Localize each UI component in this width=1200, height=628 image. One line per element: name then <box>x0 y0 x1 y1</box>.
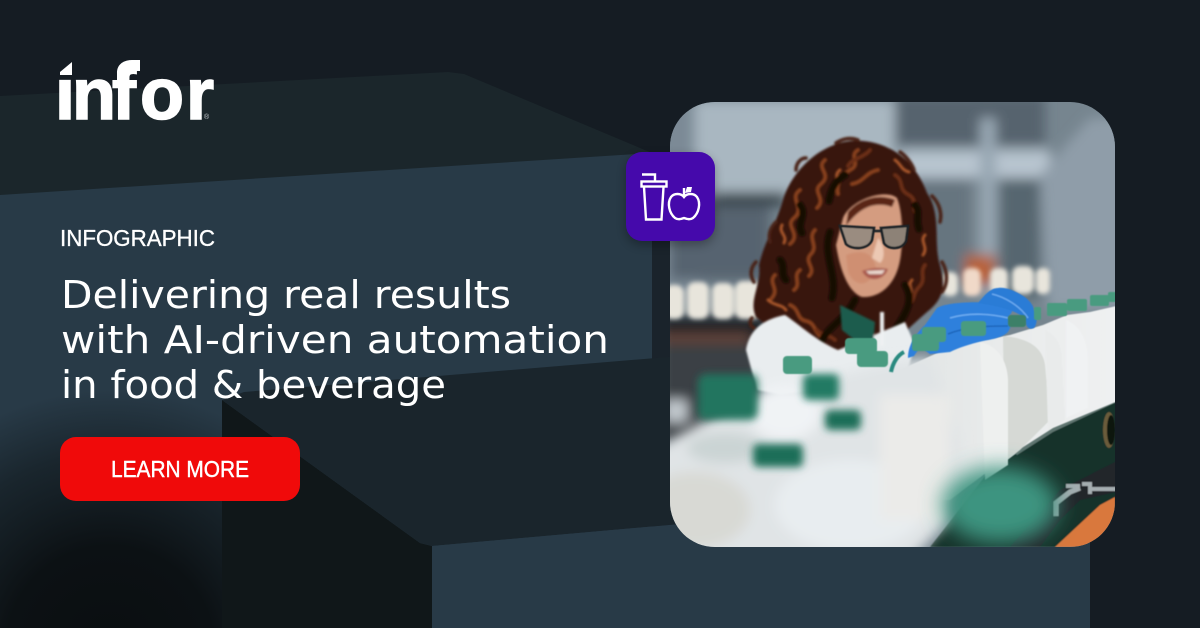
logo: infor: infor <box>55 55 214 135</box>
button: learn more: LEARN MORE <box>111 456 249 482</box>
headline: with AI-driven automation <box>61 318 609 362</box>
blurred green caps <box>698 374 861 467</box>
hair curls <box>768 150 925 357</box>
large foreground cap <box>942 467 1058 543</box>
icon badge: cup and apple <box>626 152 715 245</box>
factory background <box>660 95 1125 445</box>
eyebrow label: INFOGRAPHIC <box>60 225 215 251</box>
face <box>836 194 902 297</box>
sharp green caps <box>783 292 1118 374</box>
headline: Delivering real results <box>61 273 511 317</box>
bottles mass <box>910 306 1115 500</box>
headline <box>61 273 609 407</box>
white coat and shirt <box>746 305 915 395</box>
hair <box>750 139 946 366</box>
button: learn more <box>60 437 300 501</box>
blurred rows of bottles behind <box>664 266 1050 319</box>
photo: worker checking bottles on a production line <box>670 102 1115 547</box>
headline: in food & beverage <box>61 363 446 407</box>
gloved hands <box>891 288 1037 372</box>
conveyor <box>930 402 1115 547</box>
logo: infor: ® <box>204 113 210 121</box>
foreground blurred bottles <box>670 352 956 547</box>
glasses <box>840 226 908 248</box>
